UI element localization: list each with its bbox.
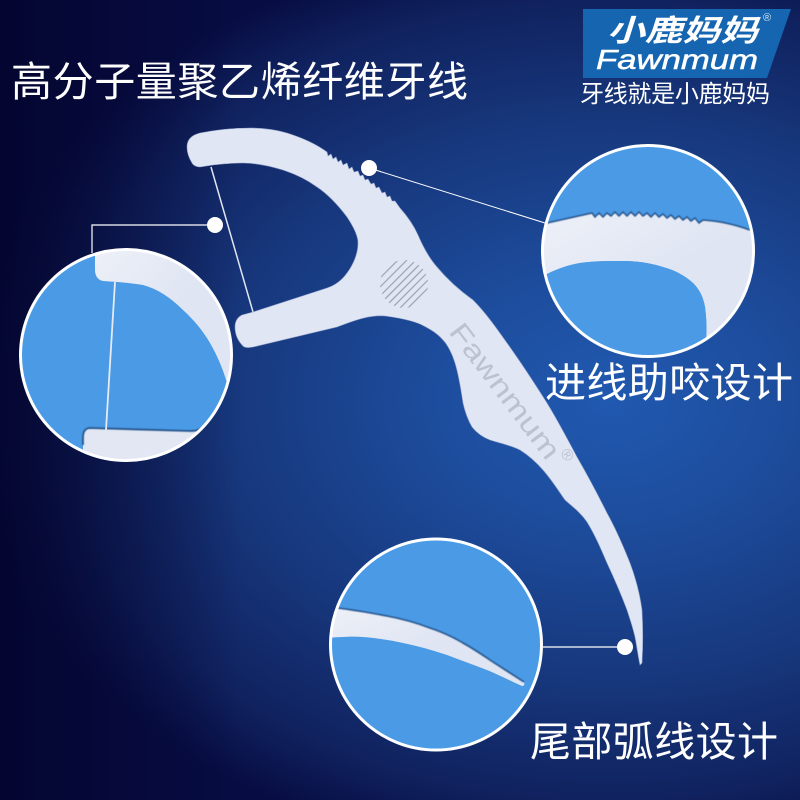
callout: serrated thread entry bbox=[361, 145, 770, 370]
leader line bbox=[92, 225, 215, 253]
brand logo bbox=[580, 9, 791, 108]
floss strand bbox=[211, 167, 253, 312]
leader dot bbox=[361, 160, 377, 176]
leader line bbox=[543, 646, 625, 648]
leader dot bbox=[617, 639, 633, 655]
registered mark: ® bbox=[763, 12, 771, 24]
zoom circle bbox=[541, 144, 755, 358]
floss pick bbox=[187, 128, 643, 665]
embossed registered mark: ® bbox=[556, 445, 577, 465]
label: thread entry: 进线助咬设计 bbox=[545, 360, 793, 406]
leader line bbox=[369, 168, 545, 223]
zoom circle bbox=[325, 538, 542, 750]
embossed brand: Fawnmum bbox=[443, 317, 567, 465]
logo latin name: Fawnmum bbox=[596, 44, 758, 75]
leader dot bbox=[207, 217, 223, 233]
logo chinese name: 小鹿妈妈 bbox=[607, 15, 762, 48]
zoom circle bbox=[20, 240, 240, 470]
pick body bbox=[187, 128, 643, 665]
callout: curved tail bbox=[325, 538, 633, 750]
label: curved tail: 尾部弧线设计 bbox=[530, 719, 778, 765]
callout: floss span bbox=[20, 217, 240, 470]
grip hatch bbox=[380, 260, 428, 308]
title: 高分子量聚乙烯纤维牙线 bbox=[11, 59, 468, 105]
logo panel bbox=[583, 9, 791, 78]
slogan: 牙线就是小鹿妈妈 bbox=[580, 81, 770, 108]
